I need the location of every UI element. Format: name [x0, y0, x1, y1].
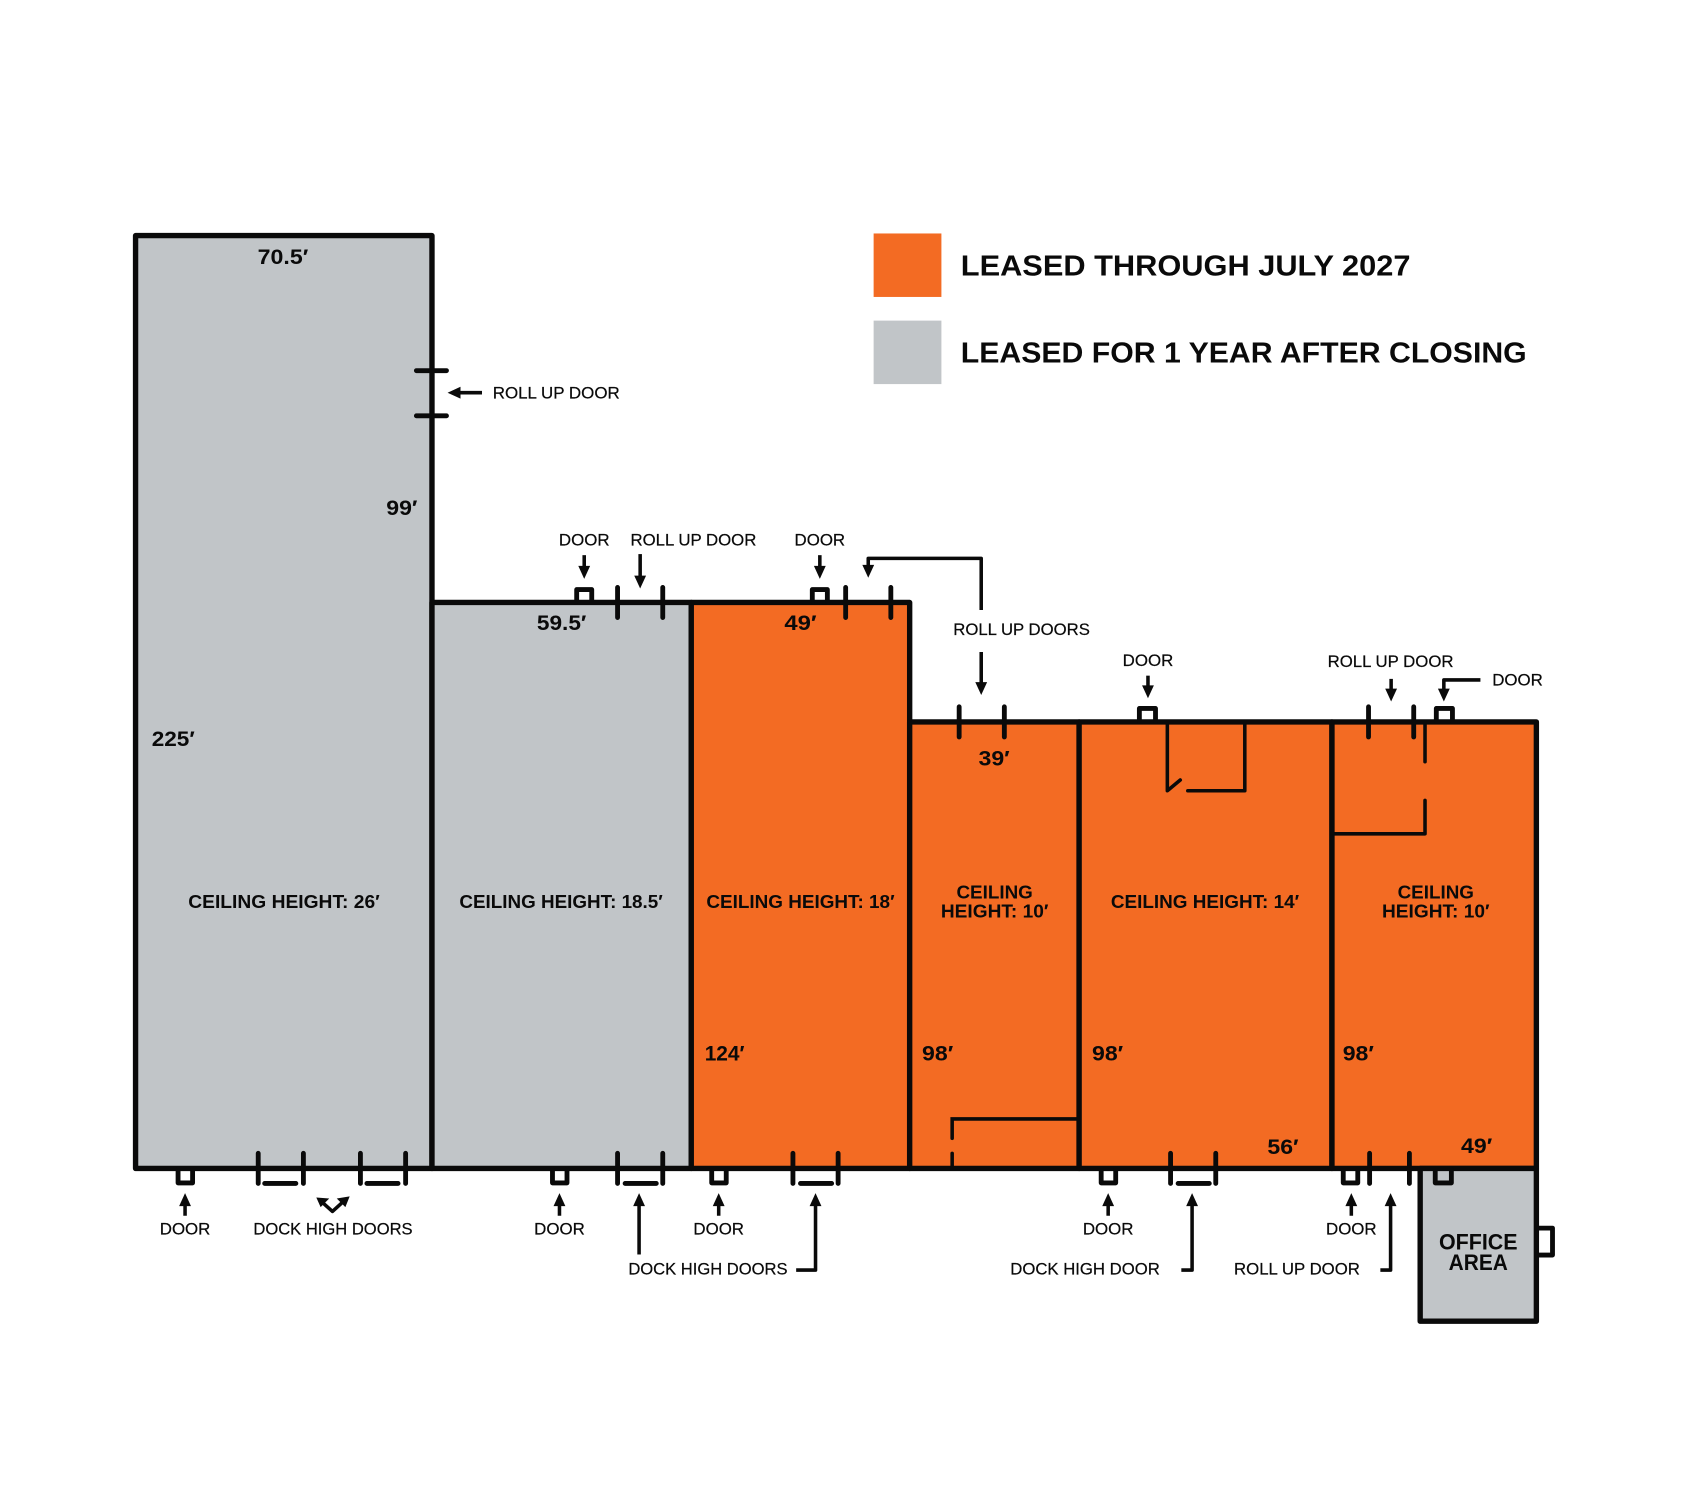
bay 5: orange, ceiling 14: 56′: [1267, 1135, 1299, 1159]
top doors: [577, 590, 1452, 721]
bay 5: orange, ceiling 14: 98′: [1092, 1041, 1123, 1065]
callout: door, bay 6 bottom: DOOR: [1326, 1220, 1377, 1239]
bay 1: gray, ceiling 26: CEILING HEIGHT: 26′: [188, 891, 380, 912]
bay 6: orange, ceiling 10: HEIGHT: 10′: [1382, 901, 1490, 922]
callout: door, bay 3 bottom: DOOR: [693, 1220, 744, 1239]
office area: OFFICE: [1439, 1230, 1518, 1255]
legend label: leased through July 2027: LEASED THROUGH JULY 2027: [961, 250, 1410, 282]
bay 4: orange, ceiling 10: HEIGHT: 10′: [941, 901, 1049, 922]
bay 5: orange, ceiling 14: [1079, 722, 1332, 1168]
bay 4: orange, ceiling 10: 39′: [979, 746, 1010, 770]
bay 4: orange, ceiling 10: CEILING: [956, 881, 1033, 902]
callout: dock high doors, bay 2 and 3: DOCK HIGH DOORS: [628, 1259, 788, 1278]
office area: AREA: [1449, 1250, 1508, 1275]
callout: roll up door, bay 6 bottom: [1234, 1193, 1397, 1278]
callout: door, bay 2 bottom: [534, 1193, 585, 1239]
bay 3: orange, ceiling 18: CEILING HEIGHT: 18′: [706, 891, 895, 912]
callout: door, bay 3 top: DOOR: [795, 530, 845, 549]
callout: dock high doors, bay 1: [253, 1196, 413, 1239]
top roll up ticks: [618, 587, 1414, 737]
roll up door ticks: right wall of bay 1: [416, 371, 446, 416]
callout: door, bay 5 top: DOOR: [1123, 651, 1173, 670]
bay 3: orange, ceiling 18: 49′: [784, 611, 817, 635]
legend: [874, 233, 1527, 384]
callout: door, bay 6 bottom: [1326, 1193, 1377, 1239]
bay 1: gray, ceiling 26: 70.5′: [258, 245, 308, 269]
callout: roll up door, bay 6 top: ROLL UP DOOR: [1328, 652, 1454, 671]
callout: door, bay 2 top: [559, 530, 609, 579]
legend swatch: orange: [874, 233, 941, 297]
callout: dock high door, bay 5: [1010, 1193, 1198, 1278]
bay 3: orange, ceiling 18: [691, 602, 910, 1168]
callout: door, bay 6 top: [1438, 670, 1543, 701]
callout: roll up door, bay 1: ROLL UP DOOR: [493, 384, 620, 403]
bay 1: gray, ceiling 26: 99′: [386, 496, 417, 520]
callout: door, bay 3 bottom: [693, 1193, 744, 1239]
callout: roll up door, bay 2 top: [630, 530, 756, 589]
bay 3: orange, ceiling 18: 124′: [705, 1041, 745, 1065]
floor plan: [136, 236, 1553, 1321]
legend label: leased for 1 year after closing: LEASED FOR 1 YEAR AFTER CLOSING: [961, 338, 1527, 370]
callout: dock high doors, bay 1: DOCK HIGH DOORS: [253, 1220, 413, 1239]
bay 6: orange, ceiling 10: 98′: [1343, 1041, 1374, 1065]
callout: roll up door, bay 6 bottom: ROLL UP DOOR: [1234, 1259, 1360, 1278]
bottom doors: [178, 1169, 1451, 1183]
callout: roll up door, bay 2 top: ROLL UP DOOR: [630, 530, 756, 549]
callout: door, bay 5 bottom: [1083, 1193, 1133, 1239]
bay 2: gray, ceiling 18.5: [432, 602, 691, 1168]
callout: door, bay 1 bottom: DOOR: [160, 1220, 210, 1239]
callout: roll up doors, bay 3 and 4: [862, 558, 1090, 695]
bay 6: orange, ceiling 10: [1332, 722, 1536, 1168]
callout: dock high doors, bay 2 and 3: [628, 1193, 821, 1278]
callout: door, bay 2 top: DOOR: [559, 530, 609, 549]
bay 1: gray, ceiling 26: 225′: [152, 727, 195, 751]
callout: door, bay 1 bottom: [160, 1193, 210, 1239]
bay 2: gray, ceiling 18.5: 59.5′: [537, 611, 586, 635]
bay 1: gray, ceiling 26: [136, 236, 432, 1168]
doors on walls: [178, 371, 1452, 1183]
callout: roll up door, bay 6 top: [1328, 652, 1454, 701]
bay 6: orange, ceiling 10: 49′: [1461, 1134, 1492, 1158]
callout: door, bay 5 top: [1123, 651, 1173, 698]
callout: door, bay 3 top: [795, 530, 845, 579]
office area: [1420, 1168, 1553, 1321]
callout: door, bay 6 top: DOOR: [1492, 670, 1543, 689]
bay 6: orange, ceiling 10: CEILING: [1398, 881, 1474, 902]
callout: roll up doors, bay 3 and 4: ROLL UP DOORS: [953, 620, 1090, 639]
bay 2: gray, ceiling 18.5: CEILING HEIGHT: 18.5′: [459, 891, 663, 912]
callout: door, bay 5 bottom: DOOR: [1083, 1220, 1133, 1239]
bay 4: orange, ceiling 10: [910, 722, 1079, 1168]
bay 5: orange, ceiling 14: CEILING HEIGHT: 14′: [1111, 891, 1300, 912]
bottom dock door ticks and sills: [258, 1153, 1409, 1183]
callout: dock high door, bay 5: DOCK HIGH DOOR: [1010, 1259, 1160, 1278]
legend swatch: gray: [874, 321, 941, 384]
bay 4: orange, ceiling 10: 98′: [922, 1041, 953, 1065]
callout: door, bay 2 bottom: DOOR: [534, 1220, 585, 1239]
